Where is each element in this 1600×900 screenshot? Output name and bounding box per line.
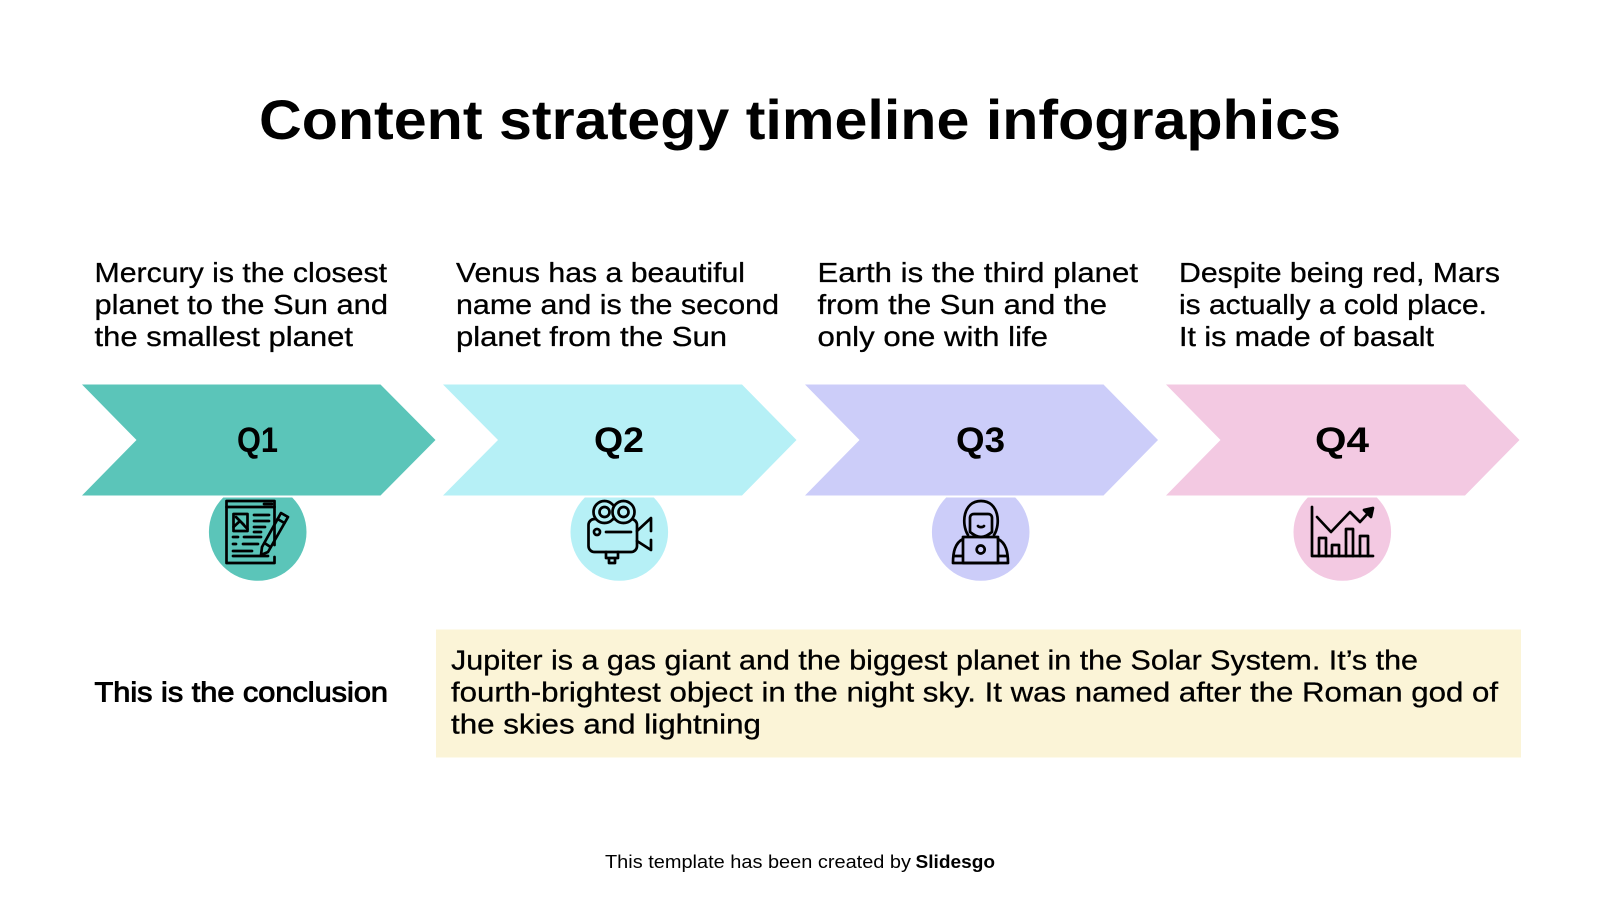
icon: person with laptop [953, 501, 1008, 563]
text block: Q2 description: planet from the Sun [456, 321, 727, 352]
arrow: Q2 [443, 384, 796, 496]
arrow: Q3: Q3 [956, 421, 1005, 460]
arrow: Q3 [805, 384, 1158, 496]
icon: growth chart [1312, 507, 1373, 556]
icon: document and pencil [226, 501, 288, 563]
text block: Q4 description: is actually a cold place. [1179, 289, 1487, 320]
title: Content strategy timeline infographics [259, 88, 1341, 151]
text block: Q2 description: name and is the second [456, 289, 779, 320]
text block: Q3 description: only one with life [818, 321, 1048, 352]
text block: Q2 description [456, 257, 779, 352]
icon: film camera [588, 501, 651, 563]
panel: conclusion: Jupiter is a gas giant and the biggest planet in the Solar System. It’s the [451, 644, 1418, 676]
text block: Q2 description: Venus has a beautiful [456, 257, 745, 288]
text block: Q3 description: Earth is the third planet [818, 257, 1138, 288]
footer credit: This template has been created by [605, 852, 911, 872]
arrow: Q4 [1166, 384, 1520, 496]
arrow: Q1 [82, 384, 436, 496]
conclusion label: This is the conclusion [94, 676, 388, 708]
icon circle: Q4 [1294, 483, 1391, 581]
icon circle: Q2 [570, 483, 668, 581]
icon circle: Q1 [209, 483, 306, 581]
text block: Q4 description: It is made of basalt [1179, 321, 1434, 352]
text block: Q1 description: planet to the Sun and [94, 289, 388, 320]
text block: Q1 description: Mercury is the closest [94, 257, 387, 288]
text block: Q3 description [818, 257, 1138, 352]
text block: Q4 description: Despite being red, Mars [1179, 257, 1500, 288]
arrow: Q2: Q2 [594, 421, 644, 460]
text block: Q4 description [1179, 257, 1500, 352]
footer credit: Slidesgo [916, 852, 995, 872]
text block: Q1 description: the smallest planet [94, 321, 353, 352]
panel: conclusion: the skies and lightning [451, 708, 761, 740]
text block: Q1 description [94, 257, 388, 352]
arrow: Q4: Q4 [1315, 421, 1370, 460]
panel: conclusion [436, 630, 1521, 758]
panel: conclusion: fourth-brightest object in the night sky. It was named after the Roman god of [451, 676, 1498, 708]
arrow: Q1: Q1 [237, 421, 278, 460]
icon circle: Q3 [932, 483, 1030, 581]
text block: Q3 description: from the Sun and the [818, 289, 1107, 320]
